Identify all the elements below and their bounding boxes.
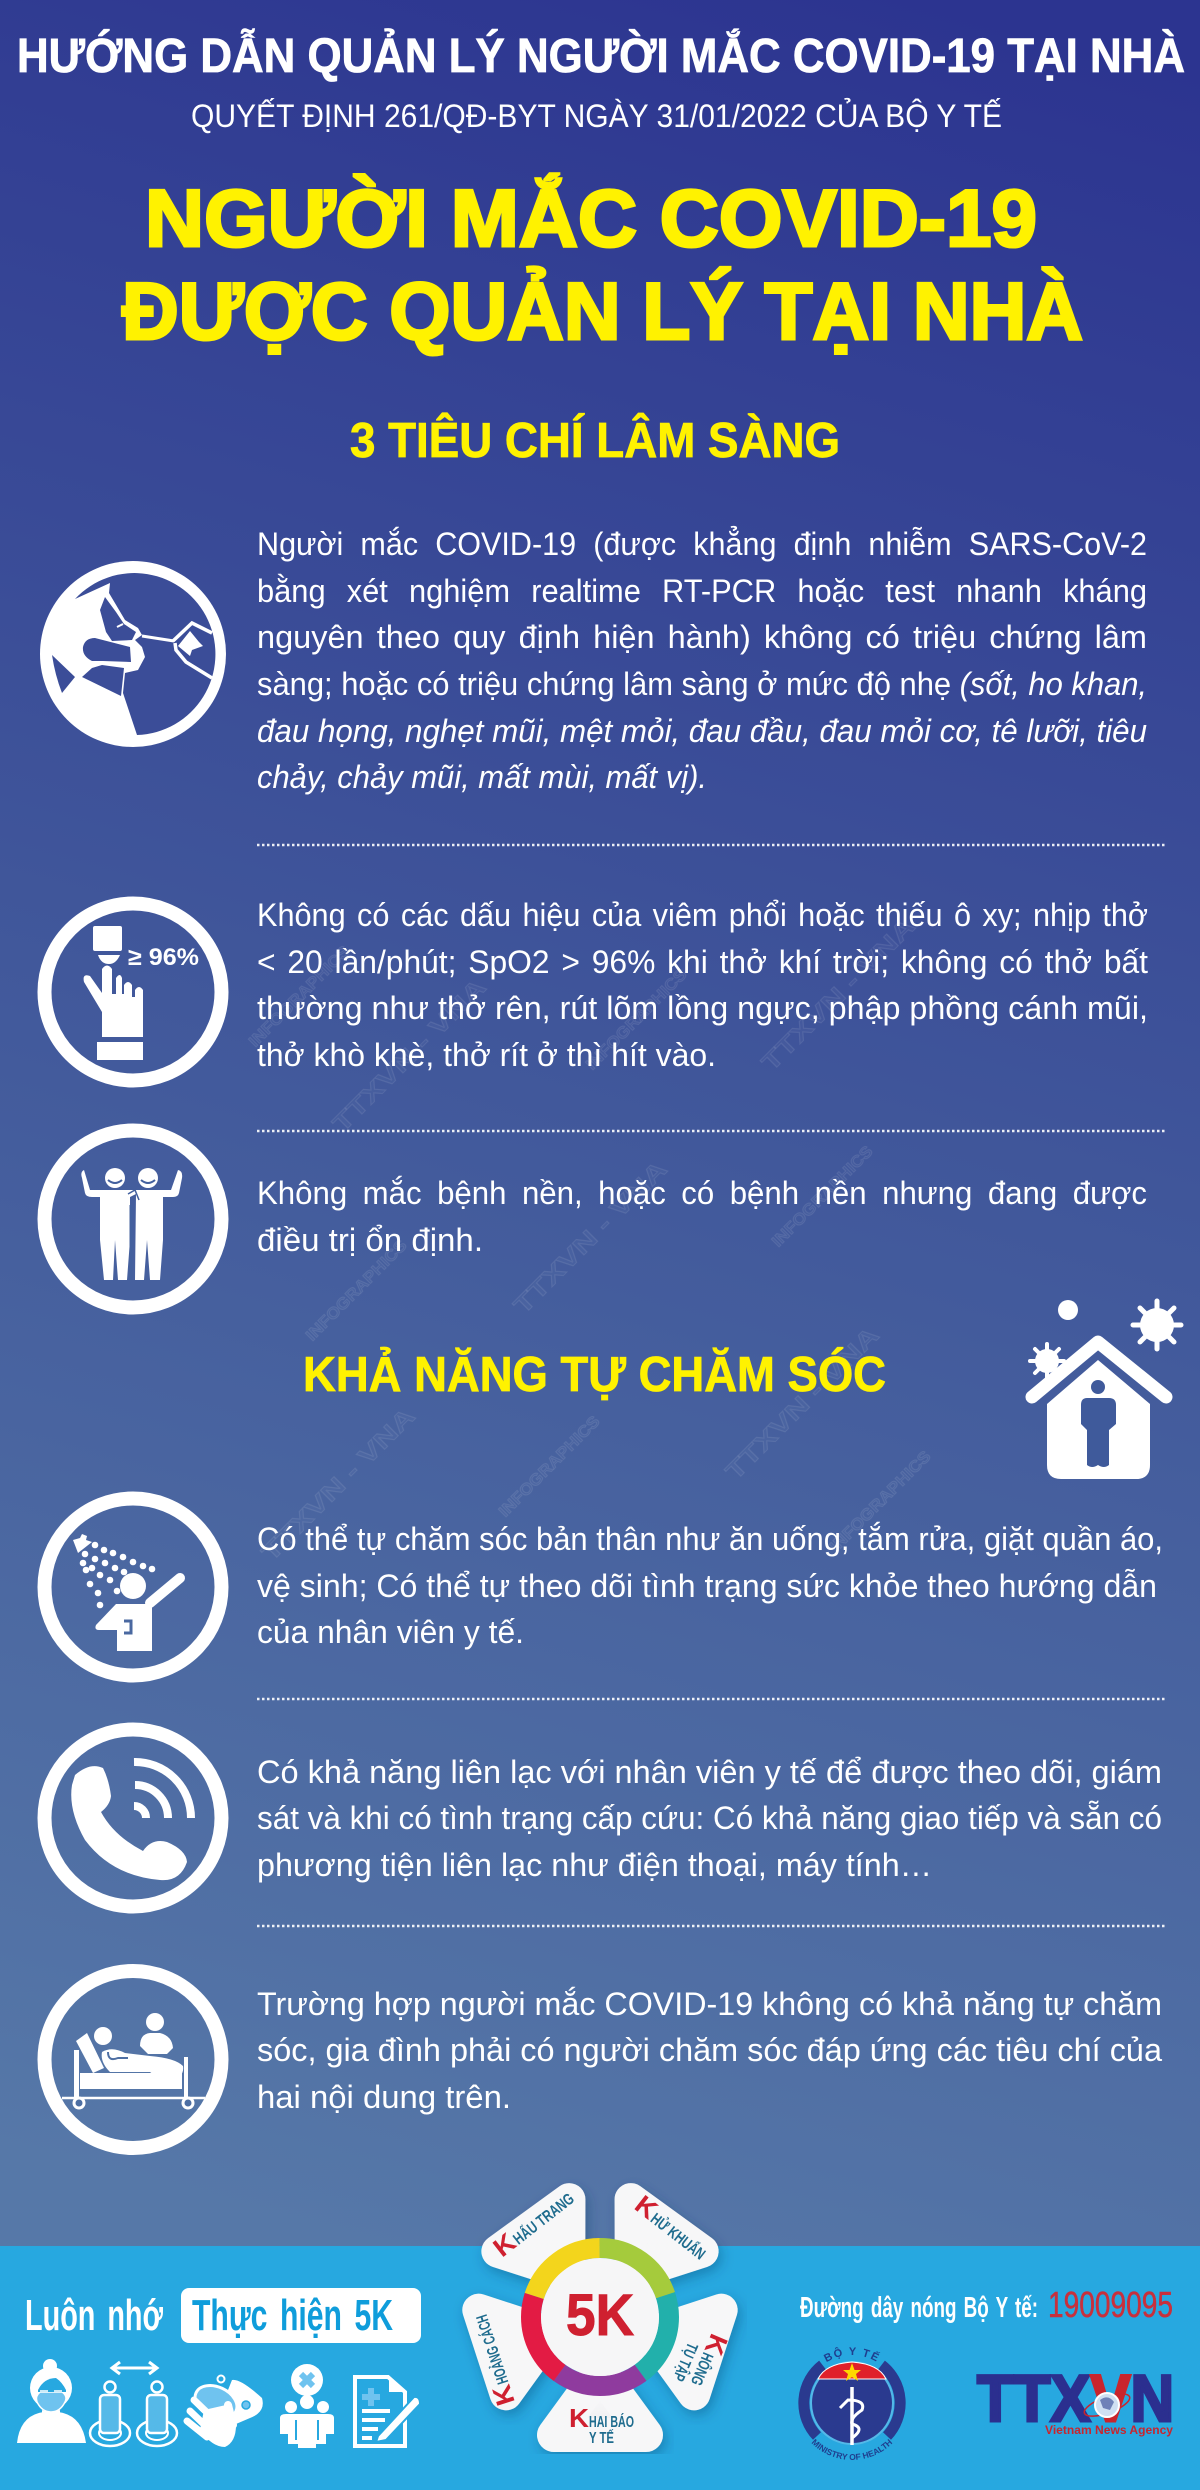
watermarks: TTXVN - VNA — [757, 913, 921, 1077]
criterion 2 icon: SpO2 finger — [44, 904, 222, 1080]
self care 3 text: hai nội dung trên. — [257, 2079, 511, 2115]
criterion 1 text: nguyên theo quy định hiện hành) không có triệu chứng lâm — [257, 619, 1147, 655]
self care 3 text: Trường hợp người mắc COVID-19 không có khả năng tự chăm — [257, 1986, 1162, 2022]
self care 1 icon: shower — [44, 1498, 222, 1676]
icon: distance — [90, 2362, 177, 2446]
icon: no gathering — [280, 2364, 334, 2448]
watermarks: INFOGRAPHICS — [827, 1448, 935, 1556]
self care 1 text — [257, 1521, 1163, 1650]
icon: health declaration — [355, 2377, 420, 2446]
criterion 1 text: chảy, chảy mũi, mất mùi, mất vị). — [257, 759, 707, 795]
label: không tụ tập: TỤ TẬP — [669, 2340, 702, 2384]
criterion 1 text — [257, 526, 1147, 795]
self care 2 text: phương tiện liên lạc như điện thoại, máy tính… — [257, 1847, 932, 1883]
5K diagram: 5K — [566, 2283, 634, 2348]
label: khử khuẩn — [629, 2189, 715, 2265]
petal: khử khuẩn — [595, 2199, 702, 2300]
centre 5K — [541, 2258, 659, 2376]
hotline label: Đường dây nóng Bộ Y tế: — [800, 2292, 1038, 2324]
reminder pill: Thực hiện 5K: Thực hiện 5K — [192, 2291, 393, 2340]
watermarks: INFOGRAPHICS — [303, 1237, 411, 1345]
self care 2 text — [257, 1754, 1162, 1883]
label: không tụ tập: HÔNG — [687, 2350, 718, 2388]
watermarks — [246, 913, 935, 1567]
label: khoảng cách: K — [486, 2381, 521, 2409]
reminder label: Luôn nhớ: Luôn nhớ — [25, 2291, 163, 2340]
watermarks: TTXVN - VNA — [257, 1403, 421, 1567]
label: khai báo y tế: HAI BÁO — [589, 2412, 634, 2431]
logo: ministry of health: MINISTRY OF HEALTH — [812, 2439, 892, 2460]
criterion 1 text: đau họng, nghẹt mũi, mệt mỏi, đau đầu, đau mỏi cơ, tê lưỡi, tiêu — [257, 713, 1147, 749]
criterion 2 text — [257, 897, 1148, 1073]
logo: ministry of health: BỘ Y TẾ — [824, 2347, 880, 2362]
criterion 1 text: sàng; hoặc có triệu chứng lâm sàng ở mức độ nhẹ (sốt, ho khan, — [257, 666, 1147, 702]
label: khoảng cách: HOẢNG CÁCH — [472, 2312, 512, 2387]
criterion 3 text: điều trị ổn định. — [257, 1222, 483, 1258]
logo: TTXVN: Vietnam News Agency — [1045, 2423, 1173, 2437]
footer band — [0, 2246, 1200, 2490]
label: khoảng cách — [463, 2312, 521, 2409]
criterion 1 icon: swab test — [40, 561, 226, 747]
label: không tụ tập — [669, 2323, 734, 2395]
criterion 2 text: thở khò khè, thở rít ở thì hít vào. — [257, 1037, 716, 1073]
logo: TTXVN: TTXVN — [977, 2361, 1174, 2435]
label: không tụ tập: K — [699, 2330, 734, 2360]
criterion 2 icon: SpO2 finger: ≥ 96% — [128, 944, 199, 971]
icon: washing hands — [187, 2376, 263, 2447]
criterion 3 text: Không mắc bệnh nền, hoặc có bệnh nền nhưng đang được — [257, 1175, 1147, 1211]
label: khai báo y tế: Y TẾ — [589, 2428, 614, 2447]
criterion 3 text — [257, 1175, 1147, 1258]
icon: house with virus — [1030, 1300, 1181, 1479]
label: khai báo y tế — [569, 2403, 634, 2447]
main title — [122, 173, 1083, 357]
self care 3 text — [257, 1986, 1162, 2115]
logo: ministry of health — [798, 2347, 906, 2460]
petal: không tụ tập — [637, 2291, 721, 2394]
petal: khai báo y tế — [554, 2372, 646, 2435]
criterion 2 text: < 20 lần/phút; SpO2 > 96% khi thở khí trời; không có thở bất — [257, 944, 1148, 980]
label: khử khuẩn: K — [629, 2189, 664, 2225]
main title: NGƯỜI MẮC COVID-19 — [145, 173, 1037, 264]
label: khai báo y tế: K — [569, 2403, 589, 2433]
label: khẩu trang — [487, 2182, 579, 2263]
self care 3 text: sóc, gia đình phải có người chăm sóc đáp ứng các tiêu chí của — [257, 2032, 1162, 2068]
criterion 1 text: bằng xét nghiệm realtime RT-PCR hoặc test nhanh kháng — [257, 573, 1147, 609]
criterion 2 text: Không có các dấu hiệu của viêm phổi hoặc thiếu ô xy; nhịp thở — [257, 897, 1148, 933]
main title: ĐƯỢC QUẢN LÝ TẠI NHÀ — [122, 266, 1083, 357]
icon: woman with mask — [17, 2359, 86, 2443]
self care 2 text: sát và khi có tình trạng cấp cứu: Có khả năng giao tiếp và sẵn có — [257, 1800, 1162, 1836]
petal: khẩu trang — [498, 2199, 605, 2300]
self care 1 text: vệ sinh; Có thể tự theo dõi tình trạng sức khỏe theo hướng dẫn — [257, 1568, 1157, 1604]
colour ring — [531, 2248, 669, 2386]
petal: khoảng cách — [479, 2291, 563, 2394]
watermarks: TTXVN - VNA — [721, 1322, 885, 1486]
watermarks: INFOGRAPHICS — [246, 943, 354, 1051]
subtitle: QUYẾT ĐỊNH 261/QĐ-BYT NGÀY 31/01/2022 CỦA BỘ Y TẾ — [191, 98, 1002, 134]
5K diagram — [463, 2182, 734, 2447]
watermarks: TTXVN - VNA — [509, 1156, 673, 1320]
label: khẩu trang: K — [487, 2227, 522, 2263]
self care 2 text: Có khả năng liên lạc với nhân viên y tế để được theo dõi, giám — [257, 1754, 1162, 1790]
self care 2 icon: phone — [44, 1730, 222, 1906]
reminder pill: Thực hiện 5K — [181, 2288, 421, 2343]
self care 3 icon: caregiver and bed — [44, 1971, 222, 2148]
label: khẩu trang: HẨU TRANG — [509, 2189, 578, 2248]
watermarks: INFOGRAPHICS — [769, 1143, 877, 1251]
watermarks: INFOGRAPHICS — [496, 1413, 604, 1521]
watermarks: INFOGRAPHICS — [583, 966, 691, 1074]
criterion 1 text: Người mắc COVID-19 (được khẳng định nhiễm SARS-CoV-2 — [257, 526, 1147, 562]
heading: khả năng tự chăm sóc: KHẢ NĂNG TỰ CHĂM SÓC — [303, 1347, 886, 1402]
criterion 2 text: thường như thở rên, rút lõm lồng ngực, phập phồng cánh mũi, — [257, 990, 1148, 1026]
heading: 3 tiêu chí lâm sàng: 3 TIÊU CHÍ LÂM SÀNG — [350, 413, 840, 468]
watermarks: TTXVN - VNA — [328, 974, 492, 1138]
criterion 3 icon: two people — [44, 1130, 222, 1308]
label: khử khuẩn: HỬ KHUẨN — [647, 2209, 709, 2263]
self care 1 text: Có thể tự chăm sóc bản thân như ăn uống, tắm rửa, giặt quần áo, — [257, 1521, 1163, 1557]
self care 1 text: của nhân viên y tế. — [257, 1614, 524, 1650]
